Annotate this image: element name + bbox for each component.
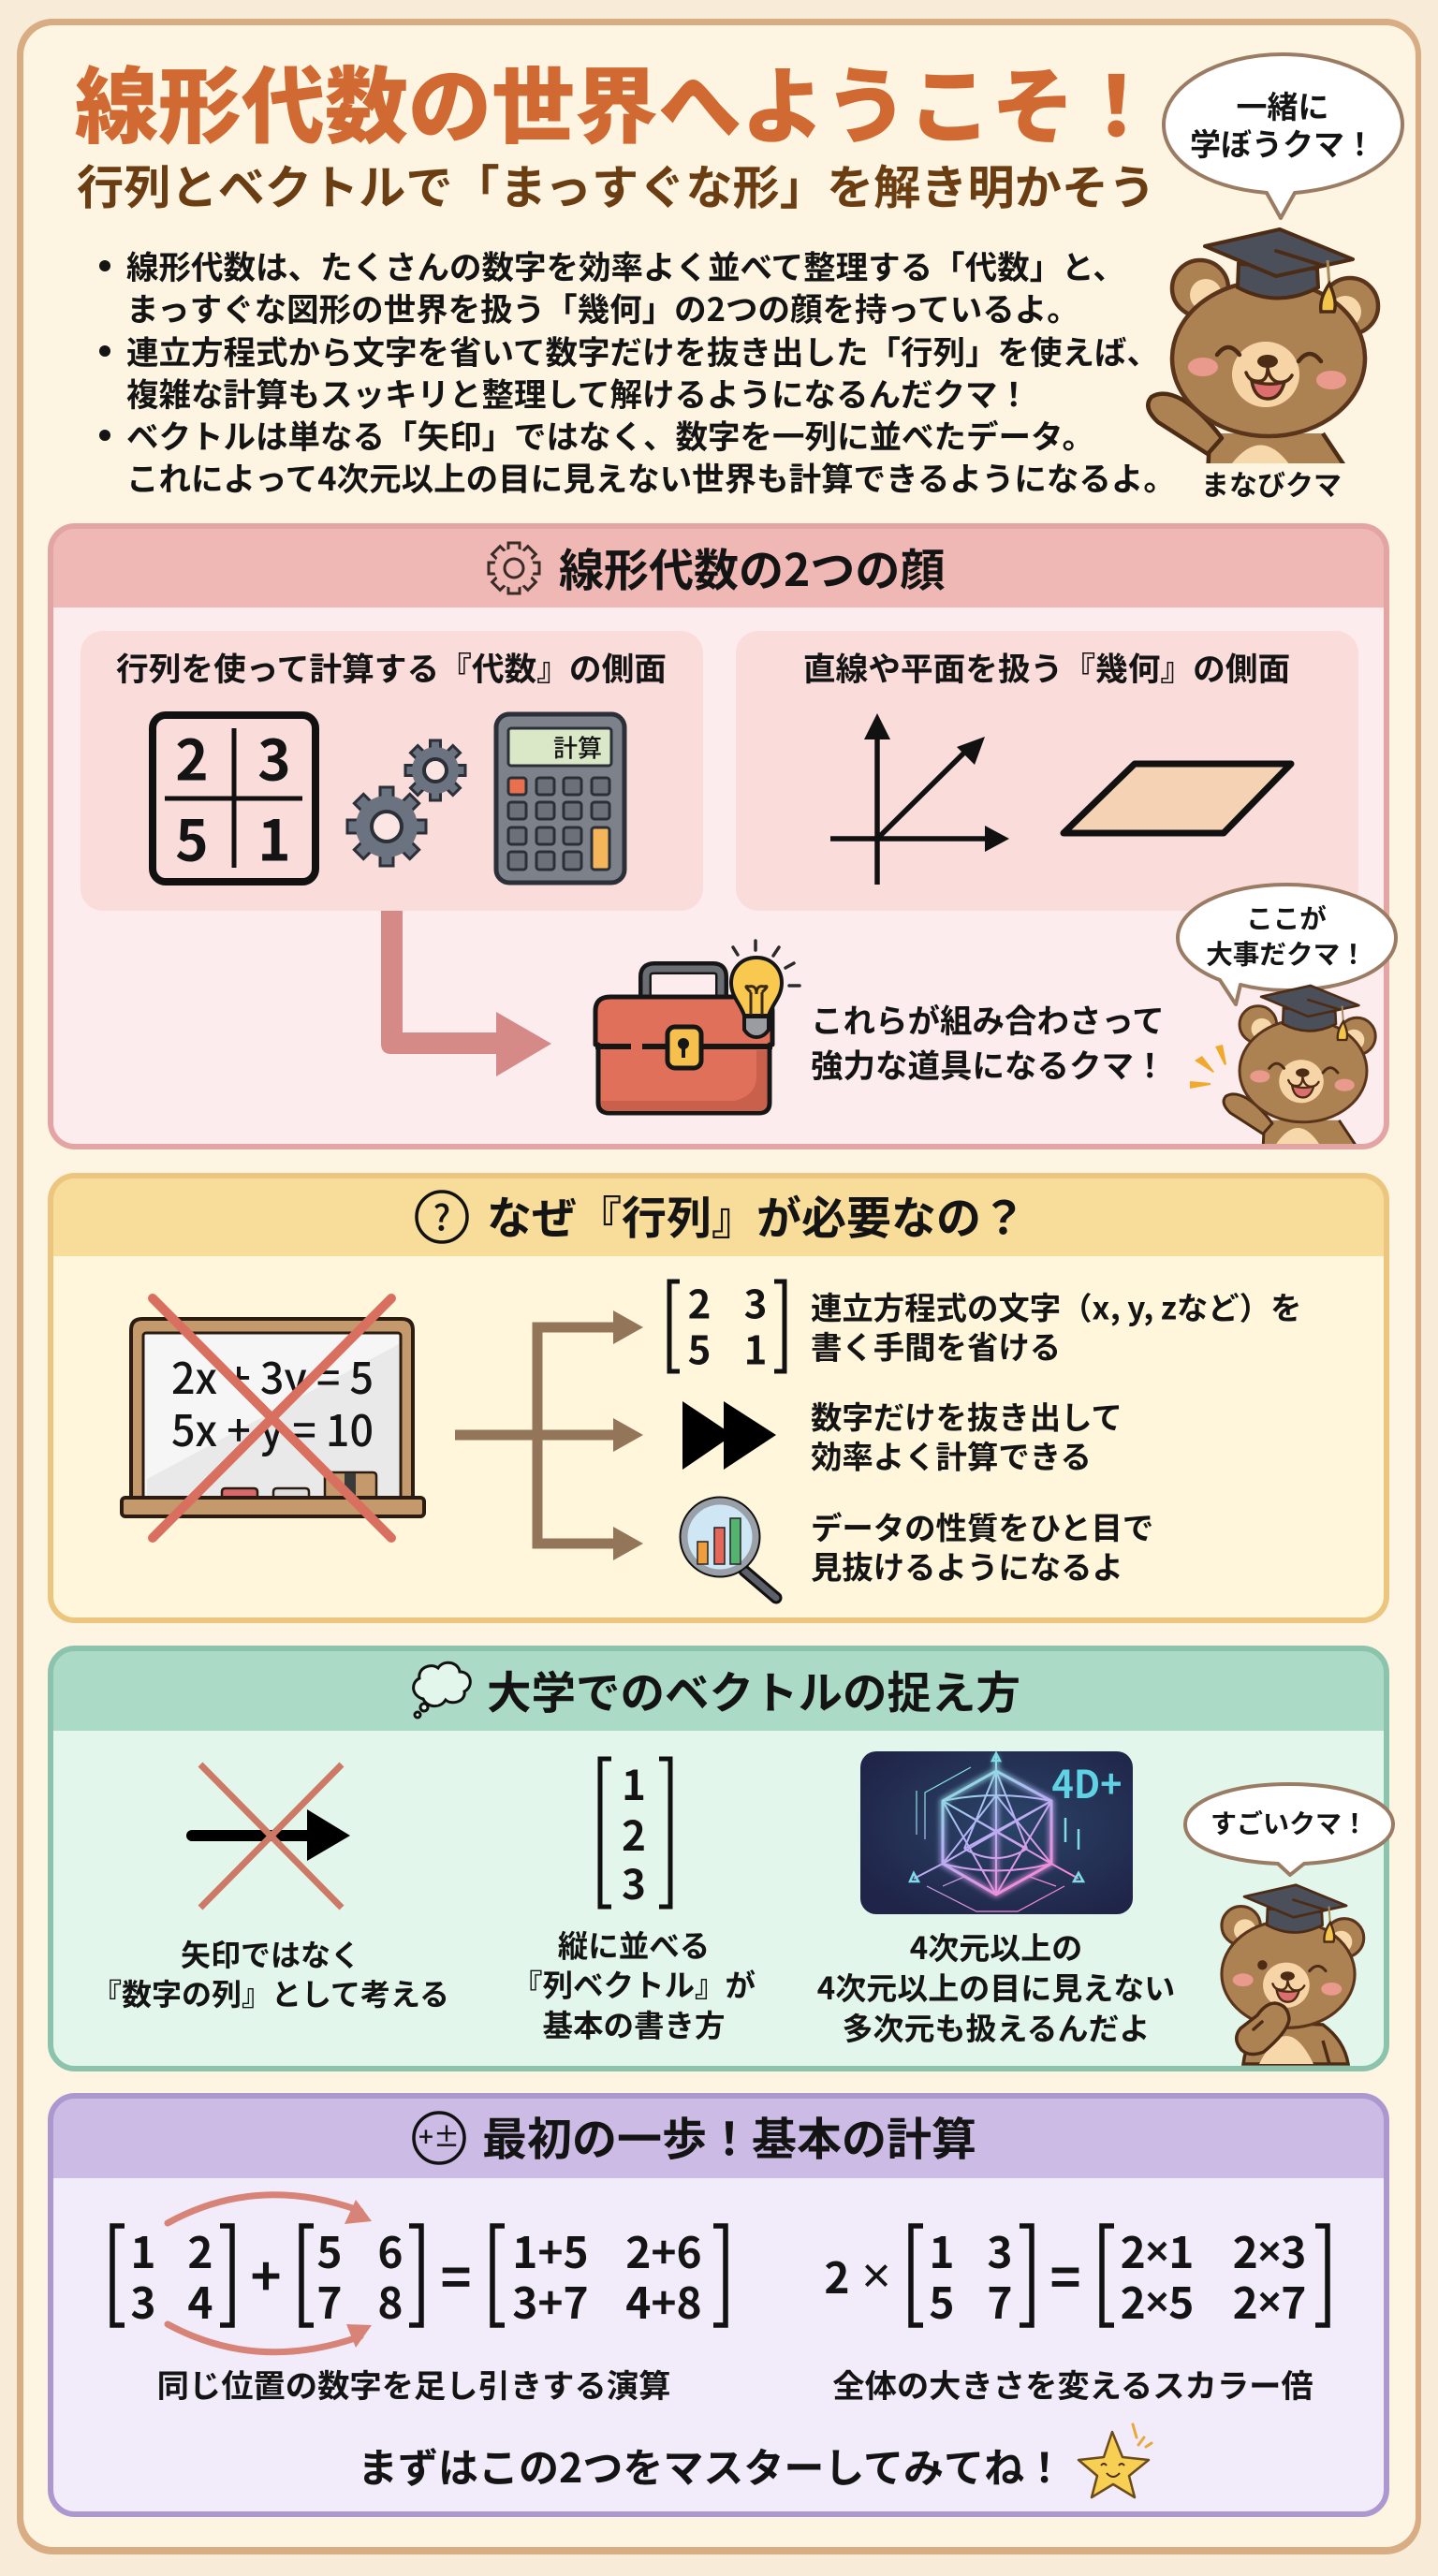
- intro bullet list: 連立方程式から文字を省いて数字だけを抜き出した「行列」を使えば、: [126, 327, 1159, 373]
- formula: matrix addition: 7: [316, 2270, 343, 2332]
- icon: gears: [347, 740, 465, 866]
- closing message: まずはこの2つをマスターしてみてね！: [358, 2437, 1064, 2495]
- formula: matrix addition: 3: [130, 2270, 156, 2332]
- item: 4D polytope image: [817, 1751, 1175, 2049]
- speech bubble: すごいクマ: [1185, 1784, 1393, 1875]
- formula: matrix addition: +: [250, 2235, 282, 2312]
- illustration: crossed-out blackboard: [122, 1298, 424, 1538]
- arrow: branching to three benefits: [455, 1310, 643, 1560]
- formula: matrix addition: 8: [377, 2270, 404, 2332]
- item: crossed-out arrow: 矢印ではなく: [181, 1932, 360, 1975]
- formula: matrix addition: [112, 2195, 726, 2352]
- formula: scalar multiplication: 2×1: [1121, 2219, 1194, 2281]
- title: 線形代数の世界へようこそ！: [75, 39, 1158, 161]
- panel heading: 線形代数の2つの顔: [559, 534, 945, 599]
- intro bullet list: これによって4次元以上の目に見えない世界も計算できるようになるよ。: [126, 453, 1176, 500]
- subtitle: 行列とベクトルで「まっすぐな形」を解き明かそう: [77, 151, 1155, 218]
- formula: matrix addition: 1: [130, 2219, 156, 2281]
- item: 4D polytope image: 4次元以上の: [910, 1924, 1082, 1969]
- illustration: crossed-out blackboard: 2x + 3y = 5: [171, 1345, 374, 1407]
- icon: light bulb: [731, 941, 800, 1037]
- formula: matrix addition: 4: [187, 2270, 213, 2332]
- speech bubble: 一緒に学ぼうクマ: [1164, 54, 1402, 218]
- formula: scalar multiplication: 5: [929, 2270, 955, 2332]
- panel: why matrices: [51, 1176, 1387, 1620]
- text: combined tool: [811, 995, 1167, 1087]
- formula: matrix addition: 2+6: [625, 2219, 702, 2281]
- mascot bear: thinking with wink: [1222, 1885, 1364, 2064]
- formula: matrix addition: 5: [316, 2219, 343, 2281]
- icon: question mark: [417, 1189, 467, 1242]
- icon: calculator: [496, 714, 624, 883]
- icon: matrix grid: 3: [257, 715, 291, 798]
- benefit 1: matrix icon and text: 連立方程式の文字（x, y, zなど）を: [811, 1282, 1301, 1329]
- icon: sparkle accents: [1190, 1045, 1226, 1089]
- intro bullet list: 複雑な計算もスッキリと整理して解けるようになるんだクマ！: [126, 369, 1030, 416]
- illustration: crossed-out blackboard: 5x + y = 10: [171, 1398, 374, 1459]
- formula: scalar multiplication: 2×3: [1233, 2219, 1306, 2281]
- benefit 1: matrix icon and text: 1: [744, 1320, 767, 1376]
- text: combined tool: これらが組み合わさって: [811, 995, 1165, 1042]
- item: 4D polytope image: 4次元以上の目に見えない: [817, 1964, 1175, 2009]
- item: column vector: 1: [622, 1752, 646, 1812]
- intro bullet list: まっすぐな図形の世界を扱う「幾何」の2つの顔を持っているよ。: [126, 284, 1079, 330]
- benefit 2: fast forward icon and text: [682, 1393, 1123, 1477]
- panel heading: 最初の一歩！基本の計算: [482, 2102, 976, 2168]
- arrow: to toolbox: [381, 911, 551, 1076]
- benefit 3: magnifier icon and text: [681, 1498, 1153, 1598]
- item: column vector: 2: [622, 1803, 646, 1863]
- benefit 3: magnifier icon and text: 見抜けるようになるよ: [811, 1543, 1123, 1588]
- item: column vector: 3: [622, 1852, 646, 1911]
- cross mark: [153, 1298, 391, 1538]
- formula: matrix addition: =: [440, 2237, 472, 2312]
- intro bullet list: [99, 242, 1176, 500]
- sub-panel: algebra: 行列を使って計算する『代数』の側面: [116, 643, 667, 690]
- icon: matrix grid: 5: [175, 796, 209, 878]
- formula: matrix addition: 4+8: [625, 2270, 702, 2332]
- formula: matrix addition: 2: [187, 2219, 213, 2281]
- formula: scalar multiplication: 2×5: [1121, 2270, 1194, 2332]
- panel heading: なぜ『行列』が必要なの？: [487, 1181, 1026, 1247]
- arrows: same-position addition: [168, 2195, 372, 2352]
- icon: coordinate axes with vector: [830, 713, 1009, 885]
- formula: matrix addition: 1+5: [512, 2219, 589, 2281]
- benefit 1: matrix icon and text: 5: [688, 1320, 711, 1376]
- sub-panel: geometry: [736, 631, 1358, 911]
- formula: scalar multiplication: 2×7: [1233, 2270, 1306, 2332]
- icon: smiling star: [1078, 2424, 1152, 2497]
- intro bullet list: 線形代数は、たくさんの数字を効率よく並べて整理する「代数」と、: [126, 242, 1125, 288]
- mascot bear: pointing out: [1224, 986, 1375, 1148]
- item: column vector: [512, 1752, 756, 2046]
- speech bubble: ここが大事だクマ: 大事だクマ！: [1206, 934, 1367, 972]
- icon: plus minus: [414, 2113, 464, 2163]
- icon: parallelogram plane: [1064, 764, 1291, 833]
- icon: matrix grid: 2: [175, 715, 209, 798]
- caption: scalar: 全体の大きさを変えるスカラー倍: [832, 2360, 1313, 2407]
- icon: gear outline: [489, 543, 539, 593]
- formula: matrix addition: 3+7: [512, 2270, 589, 2332]
- benefit 1: matrix icon and text: 3: [744, 1273, 767, 1331]
- sub-panel: geometry: 直線や平面を扱う『幾何』の側面: [803, 643, 1290, 690]
- caption: addition: 同じ位置の数字を足し引きする演算: [157, 2360, 670, 2407]
- speech bubble: 一緒に学ぼうクマ: 一緒に: [1236, 82, 1329, 127]
- benefit 3: magnifier icon and text: データの性質をひと目で: [811, 1503, 1153, 1548]
- speech bubble: ここが大事だクマ: [1178, 885, 1396, 1004]
- benefit 1: matrix icon and text: 書く手間を省ける: [811, 1322, 1061, 1368]
- icon: plus minus: +±: [418, 2117, 460, 2155]
- speech bubble: すごいクマ: すごいクマ！: [1211, 1804, 1368, 1841]
- panel: vectors at university: [51, 1648, 1393, 2069]
- item: column vector: 『列ベクトル』が: [512, 1962, 756, 2005]
- mascot bear: main: [1148, 229, 1378, 476]
- speech bubble: ここが大事だクマ: ここが: [1246, 899, 1327, 936]
- speech bubble: 一緒に学ぼうクマ: 学ぼうクマ！: [1190, 120, 1375, 165]
- benefit 1: matrix icon and text: [669, 1273, 1301, 1376]
- item: 4D polytope image: 多次元も扱えるんだよ: [842, 2004, 1151, 2049]
- panel heading: 大学でのベクトルの捉え方: [487, 1657, 1020, 1722]
- formula: scalar multiplication: ×: [861, 2247, 891, 2304]
- sub-panel: algebra: [81, 631, 703, 911]
- formula: scalar multiplication: =: [1049, 2237, 1081, 2312]
- item: crossed-out arrow: 『数字の列』として考える: [92, 1971, 449, 2014]
- icon: toolbox: [595, 968, 772, 1113]
- item: column vector: 基本の書き方: [542, 2001, 726, 2046]
- icon: calculator: 計算: [553, 730, 602, 764]
- icon: matrix grid: [153, 715, 315, 882]
- panel: first step basic calculation: [51, 2096, 1387, 2514]
- formula: scalar multiplication: 1: [929, 2219, 955, 2281]
- formula: scalar multiplication: 3: [987, 2219, 1013, 2281]
- mascot name: まなびクマ: [1201, 462, 1342, 504]
- benefit 1: matrix icon and text: 2: [688, 1273, 711, 1331]
- benefit 2: fast forward icon and text: 効率よく計算できる: [811, 1432, 1092, 1477]
- intro bullet list: ベクトルは単なる「矢印」ではなく、数字を一列に並べたデータ。: [126, 411, 1094, 458]
- item: column vector: 縦に並べる: [558, 1923, 710, 1966]
- item: 4D polytope image: 4D+: [1052, 1753, 1122, 1809]
- benefit 2: fast forward icon and text: 数字だけを抜き出して: [811, 1393, 1123, 1438]
- panel: two faces of linear algebra: [51, 526, 1396, 1148]
- text: combined tool: 強力な道具になるクマ！: [811, 1040, 1167, 1087]
- icon: thought cloud: [414, 1662, 470, 1718]
- icon: matrix grid: 1: [257, 796, 291, 878]
- formula: scalar multiplication: 2: [824, 2245, 850, 2306]
- formula: matrix addition: 6: [377, 2219, 404, 2281]
- icon: question mark: ?: [433, 1189, 450, 1241]
- item: crossed-out arrow: [92, 1764, 449, 2014]
- formula: scalar multiplication: [824, 2219, 1328, 2332]
- formula: scalar multiplication: 7: [987, 2270, 1013, 2332]
